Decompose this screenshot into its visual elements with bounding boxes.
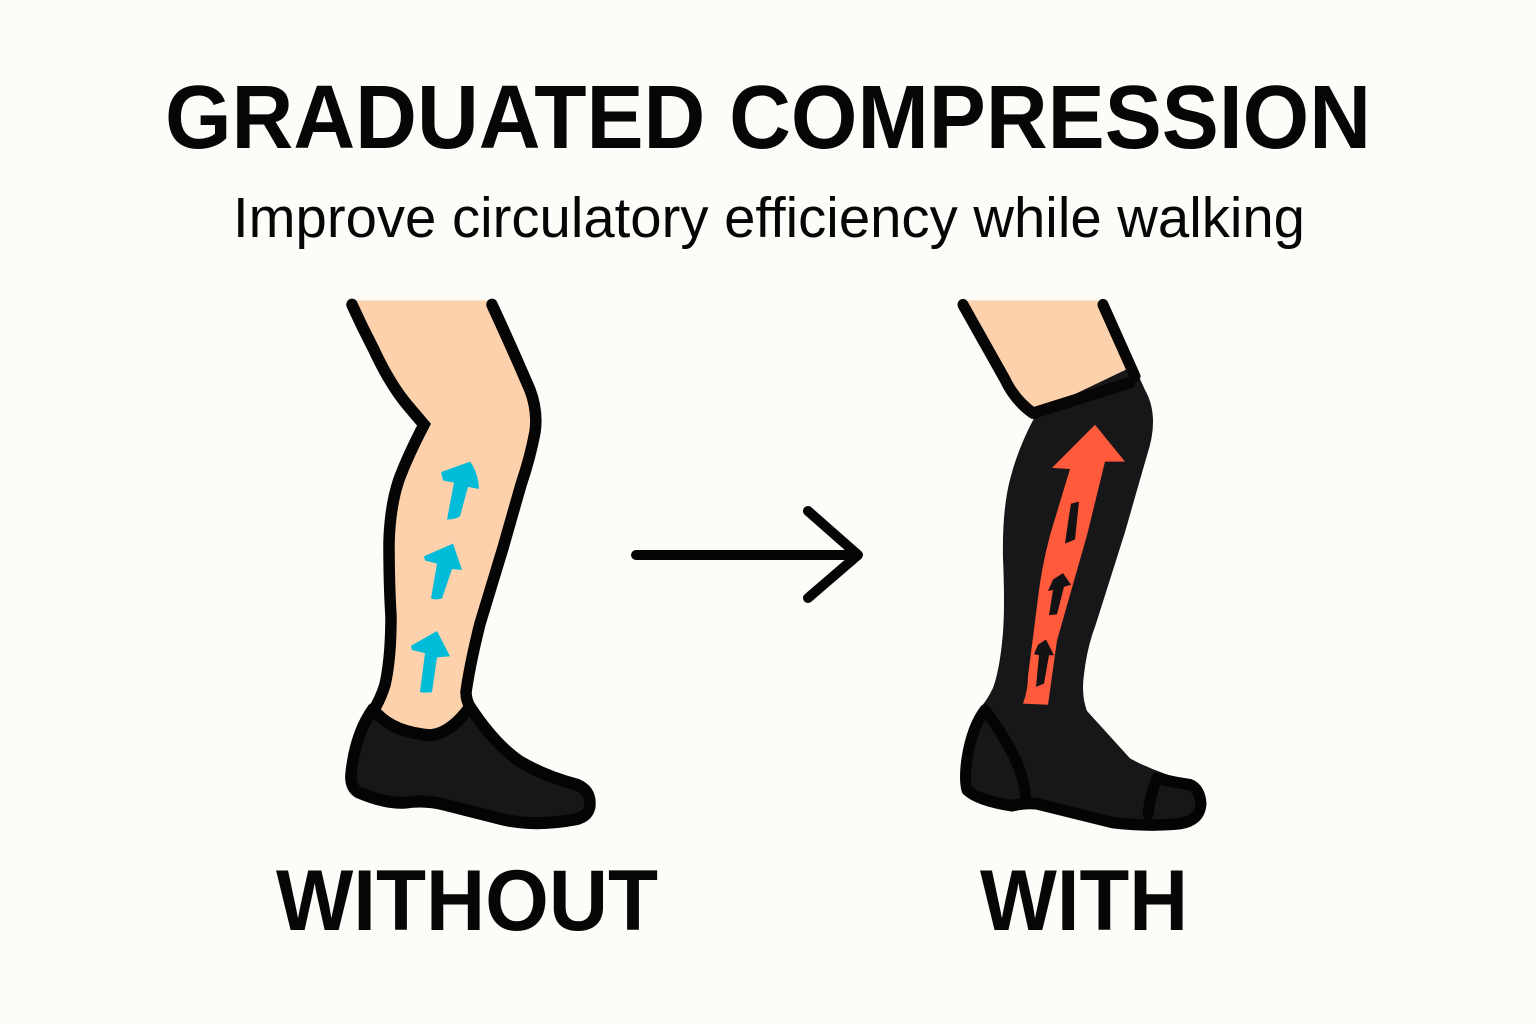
compression sock <box>962 366 1205 825</box>
leg skin <box>356 301 536 743</box>
black inner marks <box>1034 502 1079 687</box>
shoe <box>351 707 590 823</box>
red compression arrow <box>1023 425 1125 705</box>
label: with: WITH <box>980 853 1188 949</box>
blue arrow 3 <box>411 631 450 693</box>
blue flow arrows <box>411 462 479 693</box>
mark: small arrow upper <box>1048 573 1071 615</box>
mark: slot <box>1065 502 1079 544</box>
illustration: leg with compression sock <box>962 301 1205 825</box>
blue arrow 1 <box>441 462 479 519</box>
title: GRADUATED COMPRESSION <box>165 68 1371 168</box>
illustration: leg without compression <box>351 301 590 823</box>
mark: small arrow lower <box>1034 639 1054 687</box>
upper leg outline <box>963 305 1135 413</box>
blue arrow 2 <box>424 544 462 599</box>
directional arrow <box>636 511 858 598</box>
label: without: WITHOUT <box>276 853 658 949</box>
leg outline <box>352 305 536 711</box>
sock outline: heel, sole and toe <box>966 710 1201 825</box>
subtitle: Improve circulatory efficiency while walking <box>233 186 1305 250</box>
upper leg skin <box>965 301 1132 410</box>
